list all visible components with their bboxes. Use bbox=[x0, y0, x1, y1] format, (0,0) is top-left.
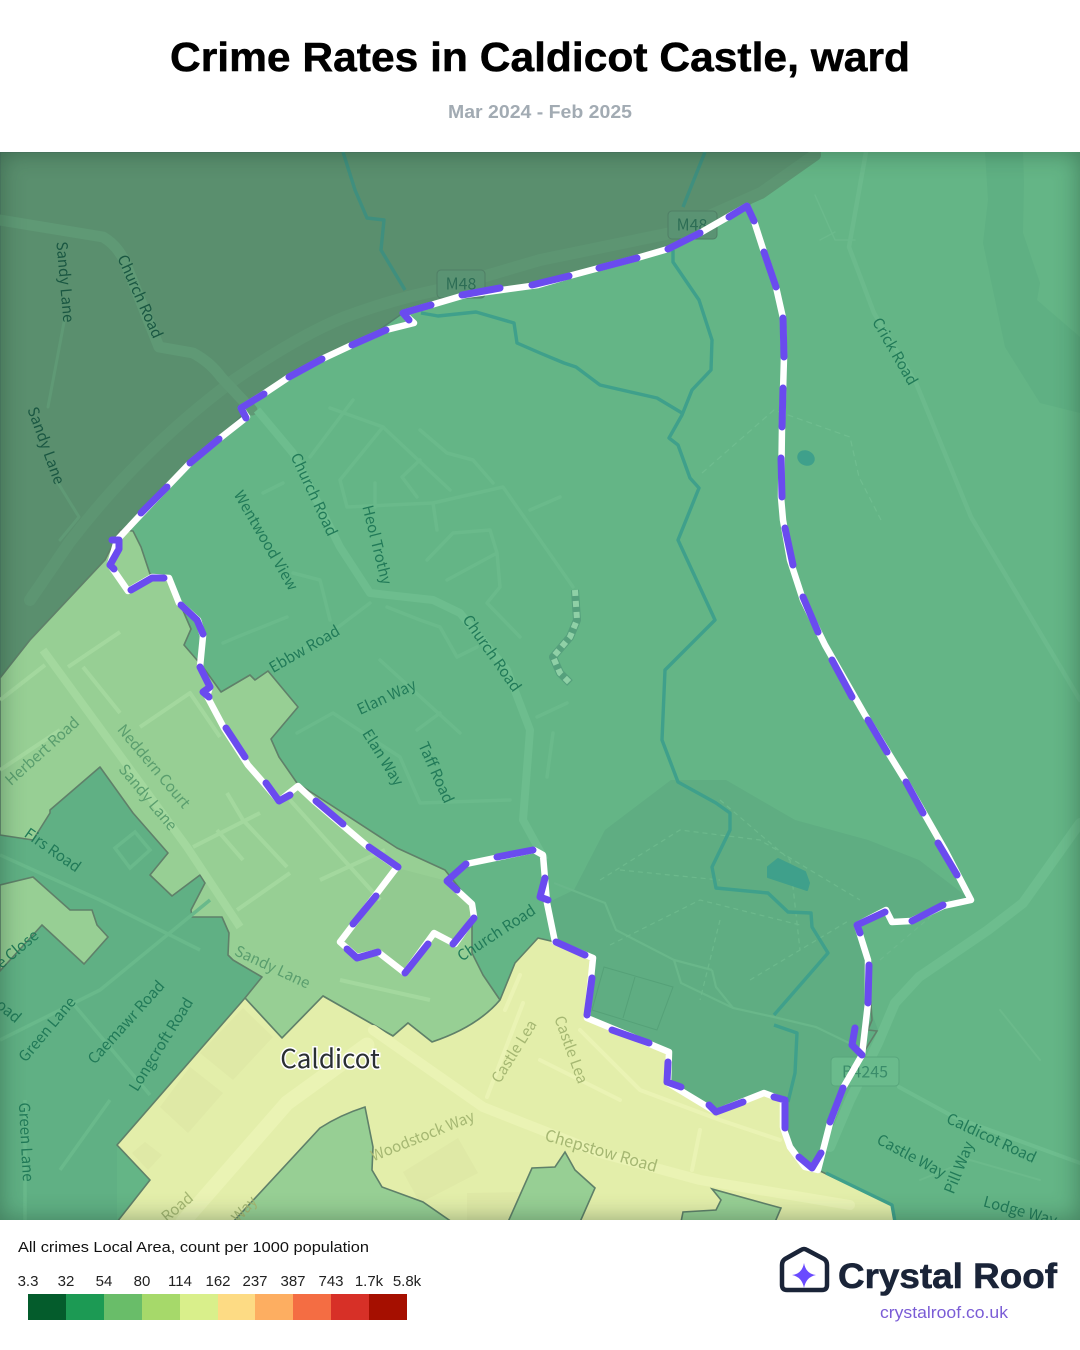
shield: M48 east: M48 bbox=[677, 211, 707, 235]
road labels: Elan Way bbox=[358, 725, 409, 790]
road labels: Sandy Lane bbox=[23, 404, 70, 487]
area: darker strip far east bbox=[983, 152, 1080, 413]
ward boundary: white underlay bbox=[110, 206, 971, 1170]
road labels: Crick Road bbox=[867, 314, 923, 389]
legend scale labels: 1.7k bbox=[355, 1273, 384, 1290]
road labels: Heol Trothy bbox=[357, 503, 397, 587]
road labels: Sandy Lane bbox=[231, 940, 314, 993]
road labels: Woodstock Way bbox=[367, 1105, 478, 1166]
legend scale labels: 743 bbox=[318, 1273, 344, 1290]
road labels: Wentwood View bbox=[229, 486, 303, 594]
road labels: Church Road bbox=[453, 900, 539, 966]
map edge vignette bbox=[0, 152, 1080, 1220]
shield: M48 west: M48 bbox=[446, 270, 476, 294]
area: slightly darker enclosed plot bbox=[340, 868, 474, 973]
rail path marking bbox=[553, 590, 577, 683]
area: yellow central Caldicot bbox=[117, 938, 895, 1222]
legend scale labels: 387 bbox=[280, 1273, 306, 1290]
area: dark green north-west bbox=[0, 152, 820, 678]
area: darker castle park bbox=[547, 780, 971, 1170]
shield: M48 east bbox=[668, 211, 717, 239]
road labels: Church Road bbox=[458, 610, 526, 696]
shield: M48 west bbox=[437, 270, 485, 298]
major roads east bbox=[815, 152, 1080, 1180]
streams bbox=[343, 152, 895, 1222]
legend scale labels: 237 bbox=[242, 1273, 268, 1290]
road labels: Ebbw Road bbox=[265, 620, 344, 678]
logo: Crystal Roof bbox=[780, 1246, 1058, 1322]
place label: Caldicot: Caldicot bbox=[280, 1039, 380, 1076]
legend scale labels: 3.3 bbox=[18, 1273, 38, 1290]
road labels: Green Lane bbox=[13, 992, 80, 1066]
legend scale labels: 162 bbox=[205, 1273, 231, 1290]
small pond bbox=[795, 447, 817, 469]
road labels: Chepstow Road bbox=[543, 1122, 661, 1177]
legend scale labels: 80 bbox=[134, 1273, 150, 1290]
road labels: Castle Lea bbox=[486, 1016, 541, 1087]
road labels: Castle Lea bbox=[549, 1013, 593, 1086]
shield: B4245: B4245 bbox=[842, 1058, 888, 1082]
streets: residential north bbox=[223, 400, 573, 803]
road labels: Neddern Court bbox=[113, 720, 196, 813]
subtitle: date range: Mar 2024 - Feb 2025 bbox=[448, 102, 632, 122]
road labels: Church Road bbox=[286, 449, 343, 539]
road labels: Firs Road bbox=[20, 823, 85, 877]
lake in park bbox=[768, 859, 809, 890]
dark-zone roads: M48 and Church Road bbox=[0, 155, 815, 600]
legend scale labels bbox=[18, 1273, 422, 1290]
road labels: Pill Way bbox=[939, 1138, 979, 1197]
area: mid green south-west bbox=[0, 760, 270, 1220]
icon: house with star bbox=[782, 1249, 827, 1290]
yellow zone buildings bbox=[132, 1008, 520, 1222]
area: green pockets in yellow zone bbox=[233, 1107, 781, 1222]
road labels: Caemawr Road bbox=[83, 976, 169, 1068]
wordmark: Crystal Roof bbox=[838, 1257, 1057, 1296]
park tracks and pitches bbox=[554, 410, 950, 1043]
title: Crime Rates in Caldicot Castle, ward bbox=[170, 34, 910, 80]
road labels: Sandy Lane bbox=[114, 759, 182, 835]
website url: crystalroof.co.uk bbox=[880, 1304, 1009, 1322]
area: light green west bbox=[0, 530, 500, 1042]
legend bbox=[18, 1239, 422, 1320]
legend scale labels: 5.8k bbox=[393, 1273, 422, 1290]
area: light green enclave bbox=[0, 877, 108, 971]
streets: mid green south-west bbox=[0, 832, 210, 1220]
road labels: Castle Way bbox=[873, 1129, 950, 1183]
streets: light green west bbox=[0, 632, 430, 1000]
legend scale labels: 54 bbox=[96, 1273, 112, 1290]
road labels: Caldicot Road bbox=[943, 1108, 1040, 1168]
road labels: Taff Road bbox=[413, 738, 459, 806]
yellow zone main roads bbox=[183, 975, 850, 1222]
road labels bbox=[0, 241, 1060, 1231]
title bbox=[170, 34, 910, 122]
legend colour bar bbox=[28, 1294, 407, 1320]
map panel bbox=[0, 152, 1080, 1220]
road labels: Longcroft Road bbox=[124, 993, 198, 1095]
Church Road bbox=[257, 410, 545, 860]
base area: mid green bbox=[0, 152, 1080, 1220]
ward edge detail near B4245 bbox=[862, 960, 877, 1055]
road labels: Elan Way bbox=[353, 674, 420, 720]
road labels: Church Road bbox=[113, 251, 168, 342]
ward boundary: purple dashes bbox=[110, 206, 957, 1168]
legend scale labels: 114 bbox=[168, 1273, 192, 1290]
legend title: All crimes Local Area, count per 1000 population bbox=[18, 1239, 369, 1256]
legend scale labels: 32 bbox=[58, 1273, 74, 1290]
road labels: Green Lane bbox=[14, 1102, 39, 1182]
road labels: Herbert Road bbox=[0, 712, 84, 790]
shield: B4245 bbox=[831, 1057, 899, 1086]
road labels: Sandy Lane bbox=[51, 241, 79, 323]
